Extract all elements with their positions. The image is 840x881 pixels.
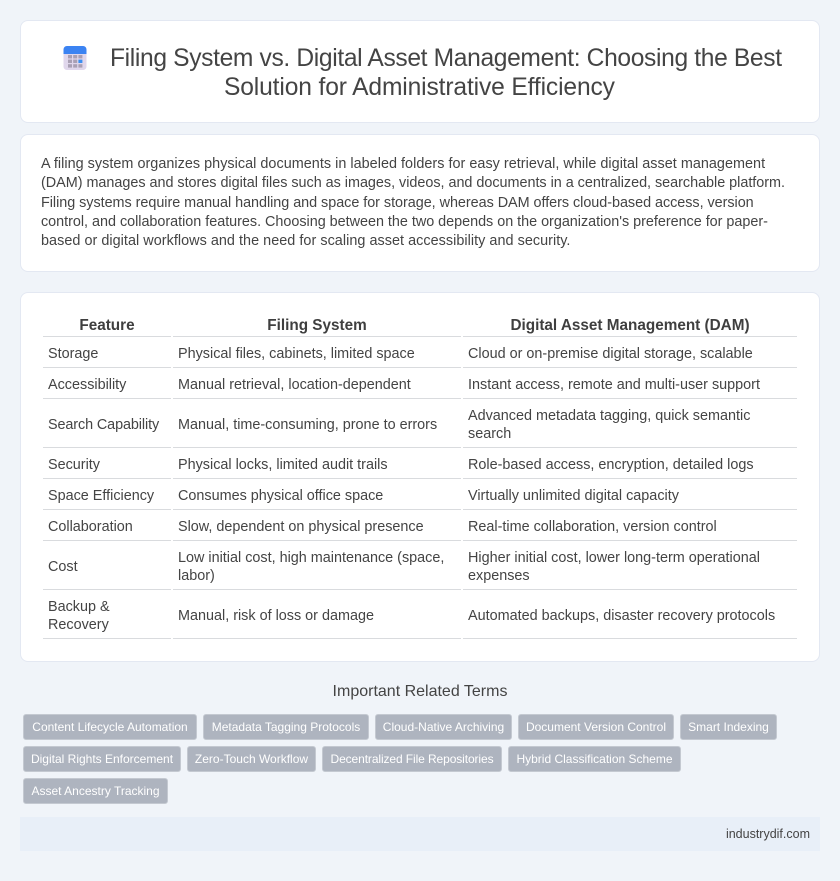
text block: description: (DAM) manages and stores digital files such as images, videos, and documents in a centralized, searchable platform. <box>41 175 785 191</box>
tag: Smart Indexing <box>688 720 769 734</box>
text block: description: A filing system organizes physical documents in labeled folders for easy retrieval, while digital asset management <box>41 156 765 172</box>
tag <box>23 746 181 772</box>
row: search capability <box>48 408 750 442</box>
text block: description <box>41 156 785 249</box>
table header row: Digital Asset Management (DAM) <box>510 317 750 334</box>
panel: comparison table <box>20 292 820 662</box>
row: search capability: Search Capability <box>48 417 159 433</box>
tag <box>203 714 369 740</box>
row: space efficiency: Consumes physical office space <box>178 488 383 504</box>
title: Solution for Administrative Efficiency <box>224 74 615 101</box>
tag <box>375 714 512 740</box>
row: backup and recovery <box>48 599 775 633</box>
tag <box>23 778 168 804</box>
row: cost: Higher initial cost, lower long-term operational <box>468 550 760 566</box>
row: search capability: Advanced metadata tagging, quick semantic <box>468 408 750 424</box>
row: security: Physical locks, limited audit trails <box>178 457 388 473</box>
row: security <box>48 457 754 473</box>
tag <box>680 714 777 740</box>
title: Filing System vs. Digital Asset Management: Choosing the Best <box>110 45 782 72</box>
row: collaboration: Slow, dependent on physical presence <box>178 519 424 535</box>
row: security: Security <box>48 457 100 473</box>
text block: description: control, and collaboration features. Choosing between the two depends on the organization's preference for paper- <box>41 214 768 230</box>
tag: Metadata Tagging Protocols <box>212 720 360 734</box>
row: search capability: search <box>468 426 511 442</box>
footer source text: industrydif.com <box>726 827 810 841</box>
heading: related terms: Important Related Terms <box>333 683 507 700</box>
row: collaboration: Real-time collaboration, version control <box>468 519 717 535</box>
row: cost: expenses <box>468 568 530 584</box>
row: cost: Low initial cost, high maintenance (space, <box>178 550 444 566</box>
row: space efficiency: Space Efficiency <box>48 488 154 504</box>
row: cost <box>48 550 760 584</box>
panel: related term tags <box>23 714 777 804</box>
row: accessibility: Manual retrieval, location-dependent <box>178 377 411 393</box>
text block: description: Filing systems require manual handling and space for storage, whereas DAM offers cloud-based access, version <box>41 195 754 211</box>
tag: Digital Rights Enforcement <box>31 752 173 766</box>
row: backup and recovery: Backup & <box>48 599 110 615</box>
row: cost: labor) <box>178 568 215 584</box>
row: backup and recovery: Automated backups, disaster recovery protocols <box>468 608 775 624</box>
row: backup and recovery: Manual, risk of loss or damage <box>178 608 374 624</box>
row: storage: Physical files, cabinets, limited space <box>178 346 415 362</box>
row: storage: Cloud or on-premise digital storage, scalable <box>468 346 753 362</box>
row: search capability: Manual, time-consuming, prone to errors <box>178 417 437 433</box>
tag <box>322 746 502 772</box>
text block: description: based or digital workflows and the need for scaling asset accessibility and security. <box>41 233 570 249</box>
tag: Document Version Control <box>526 720 666 734</box>
row: backup and recovery: Recovery <box>48 617 109 633</box>
panel: title header <box>20 20 820 123</box>
row: security: Role-based access, encryption, detailed logs <box>468 457 754 473</box>
panel: intro paragraph <box>20 134 820 272</box>
icon: calendar grid <box>64 46 86 70</box>
row: collaboration: Collaboration <box>48 519 133 535</box>
row: space efficiency: Virtually unlimited digital capacity <box>468 488 679 504</box>
tag <box>518 714 674 740</box>
tag <box>23 714 197 740</box>
row: accessibility: Instant access, remote and multi-user support <box>468 377 760 393</box>
tag: Asset Ancestry Tracking <box>31 784 160 798</box>
row: cost: Cost <box>48 559 78 575</box>
row: accessibility: Accessibility <box>48 377 126 393</box>
tag: Decentralized File Repositories <box>330 752 493 766</box>
row: storage <box>48 346 753 362</box>
table header row <box>79 317 750 334</box>
row: space efficiency <box>48 488 679 504</box>
title <box>110 45 782 101</box>
row: accessibility <box>48 377 760 393</box>
footer bar <box>20 817 820 851</box>
tag: Cloud-Native Archiving <box>383 720 504 734</box>
table header row: Filing System <box>267 317 367 334</box>
tag: Content Lifecycle Automation <box>32 720 188 734</box>
tag <box>187 746 316 772</box>
row: storage: Storage <box>48 346 98 362</box>
tag: Zero-Touch Workflow <box>195 752 308 766</box>
table header row: Feature <box>79 317 135 334</box>
tag <box>508 746 681 772</box>
row: collaboration <box>48 519 717 535</box>
tag: Hybrid Classification Scheme <box>516 752 673 766</box>
